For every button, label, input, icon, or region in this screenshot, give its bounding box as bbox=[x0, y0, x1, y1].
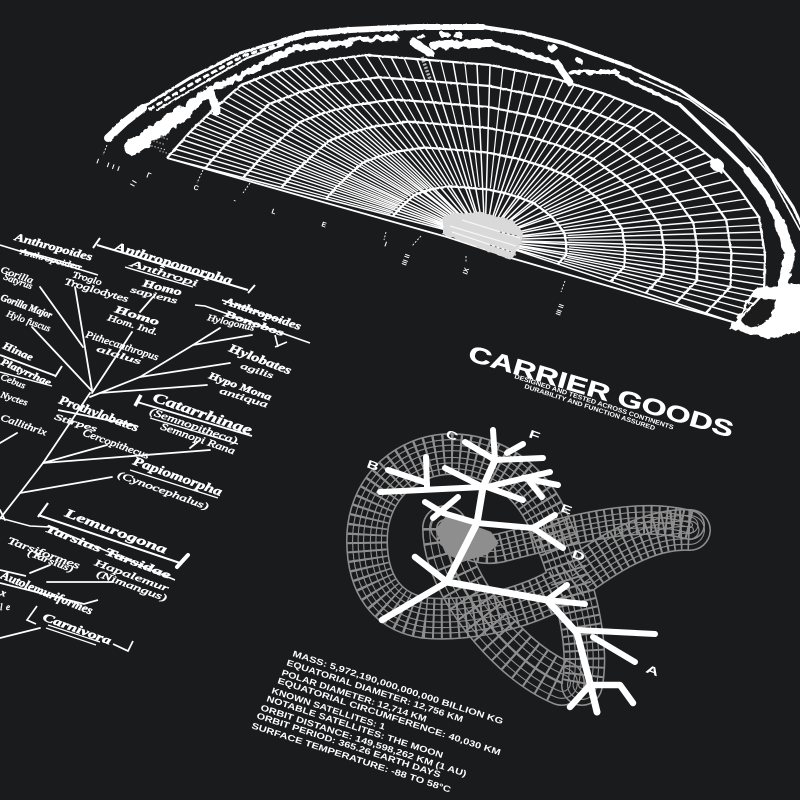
taxon: platyrrhinae: Nyctes bbox=[0, 389, 30, 408]
taxon: lemurogona: Lemurogona bbox=[61, 505, 169, 557]
chord tick labels: ᒥ bbox=[145, 171, 153, 181]
taxon: anthropoides right: Hylogonus bbox=[205, 312, 256, 333]
point labels: B bbox=[365, 459, 380, 474]
panel: handwritten phylogenetic tree bbox=[0, 231, 310, 651]
planet data list: SURFACE TEMPERATURE: -88 TO 58°C bbox=[250, 720, 452, 794]
taxon: anthropoides: Anthropoides bbox=[12, 231, 94, 264]
knot tube: lower lobe bbox=[445, 528, 562, 683]
taxon: autolemur: le bbox=[0, 602, 10, 612]
taxon: homo: Troglo bbox=[71, 269, 104, 287]
taxon: anthropoides right: Bonobos bbox=[221, 309, 285, 339]
knot tube: inner link bbox=[445, 520, 690, 549]
taxon: left apes: Hylo fuscus bbox=[4, 308, 52, 335]
branch A bbox=[577, 630, 655, 662]
title: Carrier Goods: CARRIER GOODS bbox=[466, 341, 736, 442]
taxon: left apes: Satyrus bbox=[2, 271, 34, 291]
taxon: prothylobates: Prothylobates bbox=[57, 393, 141, 435]
taxon: homo: Troglodytes bbox=[63, 277, 130, 305]
panel: wireframe knot bbox=[367, 454, 690, 685]
point labels bbox=[365, 429, 660, 679]
branch B bbox=[380, 457, 483, 492]
chord tick labels: IX bbox=[462, 267, 471, 276]
point labels: E bbox=[559, 503, 574, 518]
taxon: homo: Homo bbox=[111, 304, 160, 328]
knot tube: main ring bbox=[367, 454, 690, 685]
taxon: hypo mona: antiqua bbox=[218, 385, 270, 410]
planet data list: MASS: 5,972,190,000,000,000 BILLION KG bbox=[291, 648, 505, 726]
planet data list: EQUATORIAL CIRCUMFERENCE: 40,030 KM bbox=[276, 675, 502, 757]
chord tick labels: - bbox=[232, 197, 238, 205]
taxon: hapalemur: (Nimangus) bbox=[95, 568, 168, 604]
tree diagram overlay bbox=[380, 430, 655, 712]
planet data list: ORBIT PERIOD: 365.26 EARTH DAYS bbox=[255, 710, 442, 780]
planet data list bbox=[250, 648, 505, 794]
taxon: hypo mona: Hypo Mona bbox=[206, 370, 273, 403]
taxon: catarrhinae: Semnopi Rana bbox=[159, 421, 236, 457]
taxon: anthropoides bbox=[0, 231, 98, 275]
crack in rim bbox=[422, 57, 431, 82]
bottom right rim block bbox=[728, 283, 800, 339]
chord tick labels: III II bbox=[555, 303, 566, 317]
taxon: homo: alalus bbox=[95, 343, 144, 367]
planet data list: ORBIT DISTANCE: 149,598,262 KM (1 AU) bbox=[259, 702, 468, 779]
taxon: hylobates bbox=[226, 340, 294, 381]
tagline: DURABILITY AND FUNCTION ASSURED bbox=[523, 383, 656, 432]
planet data list: EQUATORIAL DIAMETER: 12,756 KM bbox=[285, 657, 464, 724]
taxon: papiomorpha bbox=[116, 454, 224, 513]
taxon: tarsiformes bbox=[6, 535, 81, 574]
taxon: papiomorpha: (Cynocephalus) bbox=[116, 469, 210, 513]
taxon: anthropomorpha bbox=[93, 238, 255, 293]
taxon: homo: sapiens bbox=[130, 284, 180, 306]
panel: tree-ring half disc bbox=[95, 27, 800, 339]
bottom fork bbox=[570, 685, 633, 707]
taxon: platyrrhinae: Hinae bbox=[0, 340, 35, 364]
taxon: prothylobates: Stirpes bbox=[53, 411, 100, 434]
taxon: homo: Homo bbox=[140, 278, 183, 299]
taxon: papiomorpha: Papiomorpha bbox=[131, 454, 224, 499]
chord edge bbox=[167, 158, 736, 323]
chord tick labels: III II bbox=[401, 253, 412, 267]
taxon: catarrhinae: (Semnopitheca) bbox=[148, 406, 240, 447]
chord tick labels: C bbox=[192, 184, 199, 193]
taxon: homo: Pithecanthropus bbox=[83, 329, 160, 363]
taxon: hypo mona bbox=[206, 370, 273, 410]
lower left fork bbox=[382, 557, 447, 620]
taxon: platyrrhinae bbox=[0, 340, 62, 439]
point labels: C bbox=[444, 429, 459, 444]
inner twig bbox=[445, 468, 483, 487]
speckles near rim end bbox=[152, 136, 170, 154]
main stem bbox=[447, 460, 597, 712]
chord tick labels: I I bbox=[130, 179, 139, 188]
chord tick labels: E bbox=[320, 221, 327, 230]
outer rim band bbox=[108, 27, 800, 235]
taxon: cercopithecus: Cercopithecus bbox=[81, 427, 151, 462]
primary radial rays bbox=[167, 55, 765, 323]
chord tick labels: I III bbox=[95, 158, 120, 173]
taxon: tarsiformes: (Tarsius) bbox=[26, 548, 75, 574]
taxon: carnivora: Carnivora bbox=[41, 612, 113, 648]
taxon: left apes bbox=[0, 265, 54, 335]
taxon: left apes: Gorilla Major bbox=[0, 292, 54, 321]
chord tick labels bbox=[95, 145, 566, 317]
taxon: hylobates: Hylobates bbox=[226, 340, 294, 378]
branch F bbox=[465, 430, 543, 460]
point labels: F bbox=[527, 429, 541, 444]
taxon: hapalemur bbox=[91, 558, 170, 604]
taxon: hylobates: agilis bbox=[239, 360, 276, 381]
chord tick labels: L bbox=[270, 208, 277, 217]
secondary radial rays bbox=[171, 56, 765, 310]
growth rings bbox=[167, 55, 765, 323]
taxon: lemurogona: Tarsius Tarsidae bbox=[43, 523, 173, 582]
planet data list: KNOWN SATELLITES: 1 bbox=[270, 685, 387, 732]
point labels: A bbox=[644, 664, 660, 679]
taxon: hapalemur: Hapalemur bbox=[91, 558, 170, 595]
taxon: anthropomorpha: Anthropi bbox=[127, 259, 200, 290]
tagline: DESIGNED AND TESTED ACROSS CONTINENTS bbox=[513, 373, 675, 432]
taxon: tarsiformes: Tarsiformes bbox=[6, 535, 81, 572]
ragged inner band bbox=[132, 35, 790, 285]
taxon: anthropoides: Anthropoidea bbox=[18, 246, 83, 272]
planet data list: POLAR DIAMETER: 12,714 KM bbox=[280, 667, 428, 724]
tree branches bbox=[0, 287, 252, 638]
branch D bbox=[477, 515, 563, 548]
taxon: autolemur: Autolemuriformes bbox=[0, 567, 95, 618]
cross twig bbox=[425, 497, 477, 523]
taxon: platyrrhinae: Callithrix bbox=[0, 413, 49, 439]
planet data list: NOTABLE SATELLITES: THE MOON bbox=[265, 693, 444, 760]
knot solid core bbox=[437, 517, 497, 560]
taxon: catarrhinae: Catarrhinae bbox=[151, 391, 254, 439]
taxon: platyrrhinae: Platyrrhae bbox=[0, 357, 53, 389]
taxon: catarrhinae bbox=[135, 391, 254, 457]
taxon: lemurogona bbox=[0, 503, 188, 582]
point labels: D bbox=[570, 549, 586, 564]
taxon: homo bbox=[63, 269, 183, 367]
taxon: anthropoides right bbox=[195, 295, 310, 347]
branch to upper fork bbox=[547, 585, 585, 604]
chord tick labels: I bbox=[383, 241, 388, 249]
taxon: carnivora bbox=[27, 606, 133, 651]
taxon: homo: Hom. Ind. bbox=[105, 312, 159, 337]
branch E bbox=[487, 472, 558, 500]
taxon: anthropomorpha: Anthropomorpha bbox=[112, 239, 234, 288]
hub bbox=[443, 212, 523, 260]
taxon: anthropoides right: Anthropoides bbox=[222, 295, 303, 333]
